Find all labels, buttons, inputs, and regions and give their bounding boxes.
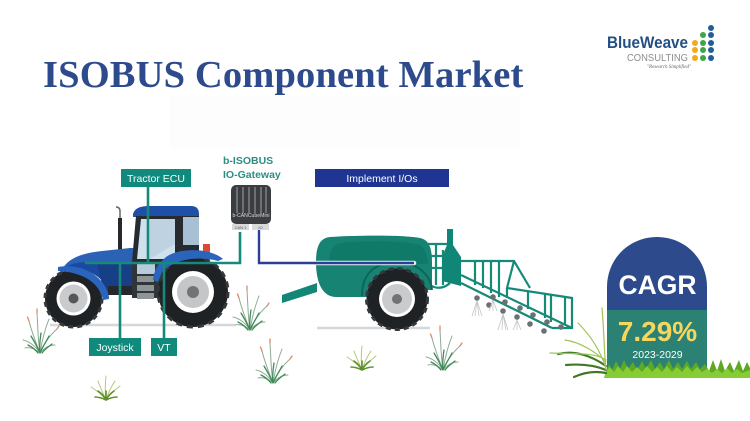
rear fender [153,250,223,282]
grass strip [604,359,750,378]
logo tagline: "Research Simplified" [647,65,692,70]
boom frame [425,244,572,328]
hood [58,248,140,295]
cab window [137,219,175,259]
gateway device: CAN 1 [235,225,247,230]
label: b-ISOBUS IO-Gateway: IO-Gateway [223,169,281,181]
gateway device: IO [258,225,263,230]
blue wiring [259,230,414,263]
cab roof [133,206,199,217]
label: b-ISOBUS IO-Gateway: b-ISOBUS [223,155,273,167]
exhaust [118,218,122,262]
gateway device [231,185,271,230]
label: Tractor ECU: Tractor ECU [127,173,185,185]
title: ISOBUS Component Market [43,54,523,96]
tower [442,229,461,286]
grass tufts [23,286,462,400]
label: Joystick [89,338,141,356]
implement wheel [366,268,428,330]
ground shadows [50,325,430,328]
spray nozzles [472,294,564,334]
label: VT [151,338,177,356]
logo: BlueWeave Consulting [607,25,714,70]
hitch [282,283,317,303]
label: Implement I/Os [315,169,449,187]
badge bottom [607,310,707,372]
badge top [607,237,707,310]
rear wheel [158,257,228,327]
faint background block [170,96,520,148]
cab base and steps [132,262,170,298]
teal wiring [85,187,240,338]
label: Implement I/Os: Implement I/Os [346,173,418,185]
tank [316,236,432,297]
front fender [58,266,109,300]
logo dots [692,25,714,61]
rear light [203,244,210,253]
CAGR period: 2023-2029 [632,349,683,361]
CAGR badge [607,237,707,372]
cab frame [132,216,199,262]
sprayer implement [282,229,572,334]
CAGR label: CAGR [618,270,697,300]
tractor [45,206,228,327]
front wheel [45,270,102,327]
wheel arch [362,262,432,296]
gateway device: b-CANCubeMini [232,213,270,219]
label: Joystick: Joystick [96,342,134,354]
label: VT: VT [157,342,171,354]
CAGR value: 7.29% [618,316,697,347]
grass clump left of badge [550,308,606,377]
logo subtitle: CONSULTING [627,52,688,64]
label: Tractor ECU [121,169,191,187]
logo wordmark: BlueWeave [607,34,688,52]
